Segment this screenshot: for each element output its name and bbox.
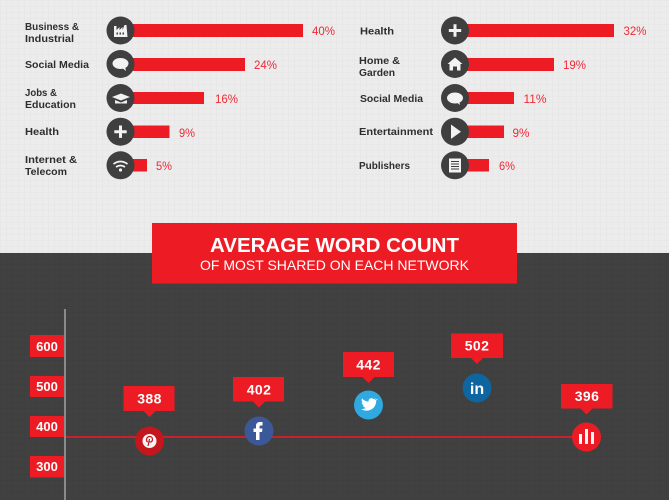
panel: left bar chart [25, 16, 335, 179]
point: Facebook 402 [233, 377, 284, 446]
panel: right bar chart [359, 16, 647, 179]
y axis labels: 400 [36, 419, 58, 434]
row: Social Media 24%: 24% [254, 58, 277, 72]
row: Jobs & Education 16%: Jobs & [25, 87, 57, 99]
y axis labels [30, 335, 64, 478]
row: Internet & Telecom 5%: Telecom [25, 166, 67, 178]
row: Health 32% [360, 16, 647, 44]
point: average 396: 396 [575, 388, 599, 404]
row: Home & Garden 19% [359, 50, 586, 79]
heading: AVERAGE WORD COUNT [210, 235, 459, 257]
point: LinkedIn 502: 502 [465, 338, 489, 354]
row: Health 9% [25, 118, 195, 146]
row: Entertainment 9%: 9% [512, 126, 530, 140]
point: Twitter 442 [343, 352, 394, 420]
row: Jobs & Education 16%: 16% [215, 92, 238, 106]
row: Entertainment 9%: Entertainment [359, 126, 434, 138]
y axis [64, 309, 66, 500]
row: Social Media 11% [360, 84, 547, 112]
point: Twitter 442: 442 [356, 356, 381, 372]
row: Business & Industrial 40% [25, 16, 335, 45]
subheading: OF MOST SHARED ON EACH NETWORK [200, 257, 470, 273]
y axis labels: 300 [36, 459, 58, 474]
row: Social Media 24% [25, 50, 277, 78]
row: Internet & Telecom 5%: Internet & [25, 154, 77, 166]
row: Health 32%: 32% [624, 24, 647, 38]
row: Internet & Telecom 5%: 5% [156, 159, 172, 173]
row: Jobs & Education 16%: Education [25, 99, 76, 111]
y axis labels: 500 [36, 379, 58, 394]
point: Facebook 402: 402 [247, 382, 271, 398]
row: Social Media 11%: 11% [524, 92, 547, 106]
row: Publishers 6%: Publishers [359, 160, 410, 172]
row: Health 32%: Health [360, 26, 394, 38]
row: Publishers 6%: 6% [499, 159, 515, 173]
row: Jobs & Education 16% [25, 84, 238, 112]
row: Home & Garden 19%: Garden [359, 67, 395, 79]
point: LinkedIn 502: in [470, 381, 484, 398]
y axis labels: 600 [36, 339, 58, 354]
row: Business & Industrial 40%: Industrial [25, 33, 74, 45]
row: Home & Garden 19%: 19% [563, 58, 586, 72]
chart: word count by network [30, 309, 612, 500]
point: LinkedIn 502 [451, 334, 503, 402]
row: Home & Garden 19%: Home & [359, 55, 400, 67]
row: Business & Industrial 40%: 40% [312, 24, 335, 38]
point: average 396 [561, 384, 612, 452]
banner: average word count [152, 223, 517, 284]
baseline [66, 436, 586, 438]
row: Publishers 6% [359, 151, 515, 179]
row: Health 9%: Health [25, 126, 59, 138]
row: Social Media 11%: Social Media [360, 93, 423, 105]
row: Business & Industrial 40%: Business & [25, 21, 79, 33]
point: Pinterest 388: 388 [137, 390, 162, 406]
point: Pinterest 388 [124, 386, 174, 456]
row: Health 9%: 9% [179, 126, 195, 140]
row: Internet & Telecom 5% [25, 151, 172, 179]
row: Entertainment 9% [359, 118, 530, 146]
row: Social Media 24%: Social Media [25, 59, 89, 71]
